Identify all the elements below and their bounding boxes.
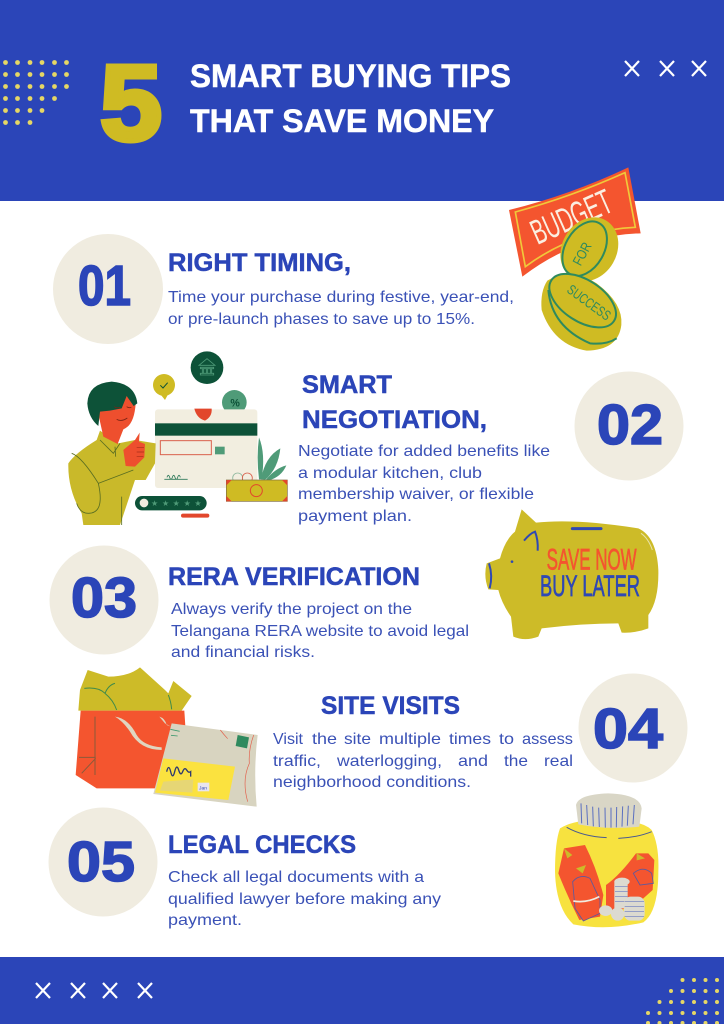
heading: RIGHT TIMING, (168, 249, 351, 277)
panel: footer band (0, 957, 724, 1024)
header background (0, 0, 724, 201)
heading (302, 371, 487, 434)
heading: LEGAL CHECKS (168, 831, 356, 859)
footer background (0, 957, 724, 1024)
icon: budget for success coins: FOR (569, 239, 595, 268)
number badge 03 (50, 546, 158, 654)
x marks bottom (36, 983, 152, 998)
icon: piggy bank save now buy later: SAVE NOW (547, 543, 637, 576)
body text: and financial risks. (171, 644, 315, 661)
body text (273, 731, 573, 791)
body text: real (544, 753, 573, 770)
title (190, 58, 511, 139)
icon: man with credit card: ★ (194, 499, 202, 508)
icon: shopping bag and envelope (76, 667, 258, 807)
body text: a modular kitchen, club (298, 465, 482, 482)
number badge 05: 05 (67, 830, 135, 894)
icon: man with credit card: ★ (151, 499, 158, 508)
heading: SMART (302, 371, 392, 399)
body text: or pre-launch phases to save up to 15%. (168, 311, 475, 328)
number badge 01 (53, 234, 163, 344)
number badge 02 (574, 372, 684, 480)
panel: tip 01 right timing (53, 234, 514, 344)
number badge 03: 03 (71, 566, 137, 630)
body text (171, 601, 469, 661)
number badge 02: 02 (597, 393, 663, 457)
body text: Always verify the project on the (171, 601, 412, 618)
big number 5: 5 (100, 42, 162, 163)
panel: tip 02 smart negotiation (298, 371, 684, 525)
body text: to (499, 731, 514, 748)
body text: traffic, (273, 753, 321, 770)
title: THAT SAVE MONEY (190, 103, 494, 139)
icon: budget for success coins: SUCCESS (564, 281, 614, 323)
body text: Visit (273, 731, 304, 748)
icon: piggy bank save now buy later: BUY LATER (540, 570, 640, 603)
icon: piggy bank save now buy later (485, 509, 658, 639)
icon: shopping bag and envelope: Jan (199, 785, 207, 791)
body text: the (504, 753, 528, 770)
body text: assess (522, 731, 573, 748)
body text: neighborhood conditions. (273, 774, 471, 791)
body text: the (312, 731, 337, 748)
body text: multiple (379, 731, 441, 748)
body text: payment. (168, 912, 242, 929)
icon: budget for success coins (509, 167, 641, 351)
body text (298, 443, 550, 525)
body text: Check all legal documents with a (168, 869, 424, 886)
icon: jar of coins (555, 793, 658, 927)
icon: man with credit card: ★ (162, 499, 169, 508)
body text: times (449, 731, 491, 748)
icon: man with credit card: ★ (184, 499, 191, 508)
panel: tip 05 legal checks (48, 808, 441, 929)
heading: NEGOTIATION, (302, 406, 487, 434)
body text (168, 869, 441, 929)
dot pattern bottom (646, 978, 719, 1024)
x marks top (625, 61, 706, 76)
dot pattern (3, 60, 69, 125)
body text: site (344, 731, 371, 748)
body text: Telangana RERA website to avoid legal (171, 623, 469, 640)
number badge 05 (48, 808, 158, 916)
number badge 04: 04 (593, 697, 663, 761)
icon: budget for success coins: BUDGET (525, 182, 618, 252)
icon: man with credit card: % (230, 397, 240, 409)
icon: man with credit card: ★ (173, 499, 180, 508)
panel: header band (0, 0, 724, 201)
panel: tip 04 site visits (273, 674, 688, 791)
body text (168, 289, 514, 328)
heading: RERA VERIFICATION (168, 563, 420, 591)
number badge 01: 01 (78, 254, 131, 318)
number badge 04 (578, 674, 688, 782)
body text: Time your purchase during festive, year-end, (168, 289, 514, 306)
body text: qualified lawyer before making any (168, 891, 441, 908)
body text: waterlogging, (336, 753, 442, 770)
heading: SITE VISITS (321, 692, 460, 720)
body text: membership waiver, or flexible (298, 486, 534, 503)
title: SMART BUYING TIPS (190, 58, 511, 94)
panel: tip 03 rera verification (50, 546, 469, 661)
body text: payment plan. (298, 508, 412, 525)
icon: man with credit card (68, 351, 287, 525)
body text: Negotiate for added benefits like (298, 443, 550, 460)
body text: and (458, 753, 488, 770)
